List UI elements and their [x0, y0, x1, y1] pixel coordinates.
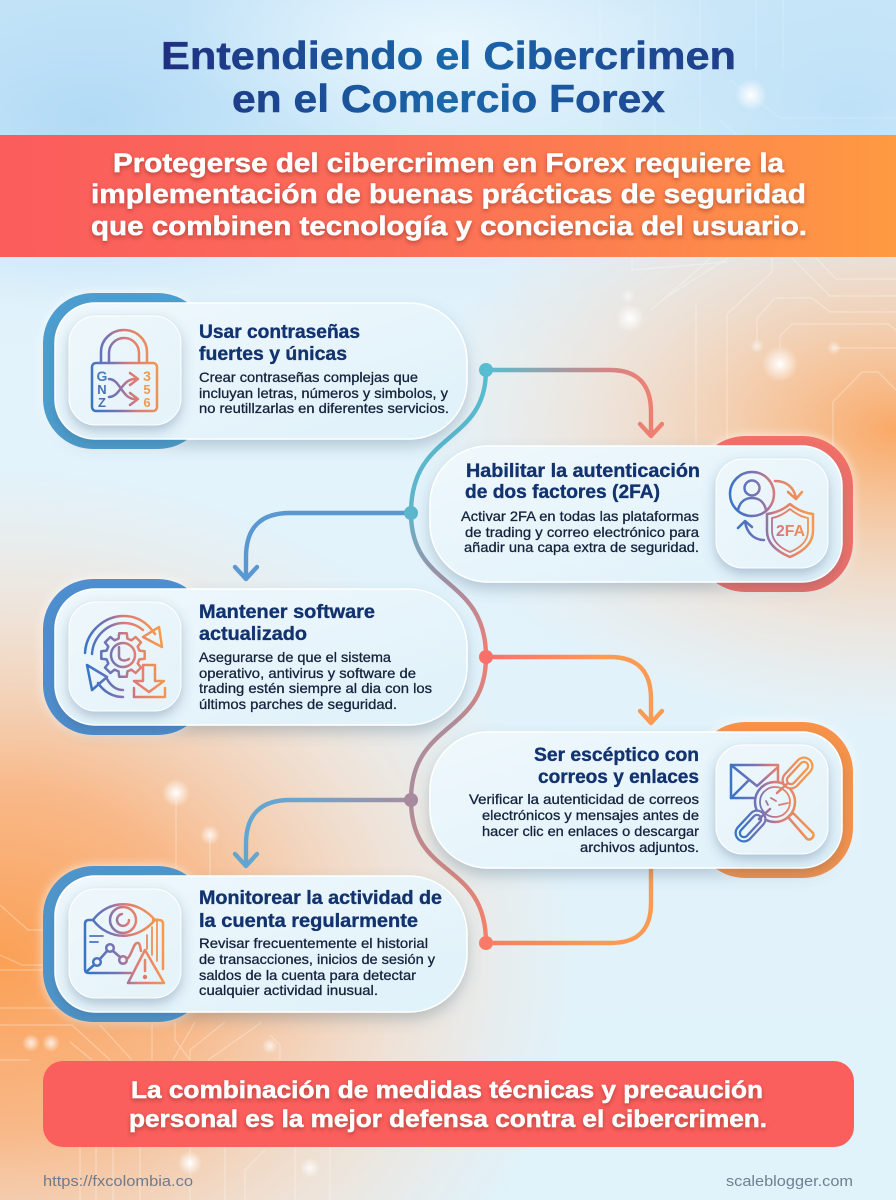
icon: gear and update arrows — [85, 616, 165, 697]
step 5 body: cualquier actividad inusual. — [199, 982, 378, 998]
banner text: que combinen tecnología y conciencia del usuario. — [91, 211, 807, 241]
step 1 body — [199, 369, 449, 416]
step 5 body: de transacciones, inicios de sesión y — [199, 951, 435, 967]
card backing — [43, 866, 208, 1022]
step 1 body: no reutillzarlas en diferentes servicios. — [199, 400, 449, 416]
step 3 heading: Mantener software — [199, 602, 375, 623]
step 2 heading: de dos factores (2FA) — [465, 482, 660, 503]
arrow: to step 3 — [235, 513, 411, 579]
card backing — [43, 293, 208, 449]
bottom banner text: La combinación de medidas técnicas y precaución — [131, 1077, 763, 1104]
card body — [430, 446, 842, 582]
step 2 body: Activar 2FA en todas las plataformas — [461, 508, 699, 524]
step 3 body: trading estén siempre al dia con los — [199, 680, 432, 696]
panel: step 1 contraseñas — [43, 293, 467, 449]
arrow: to step 2 — [486, 370, 662, 436]
arrow: to step 4 — [486, 657, 662, 723]
step 5 body — [199, 935, 435, 998]
step 5 heading: Monitorear la actividad de — [199, 888, 442, 909]
top banner — [0, 135, 896, 257]
step 4 heading — [534, 745, 699, 788]
step 2 body — [461, 508, 699, 555]
step 5 body: Revisar frecuentemente el historial — [199, 935, 428, 951]
step 5 body: saldos de la cuenta para detectar — [199, 967, 416, 983]
banner text: implementación de buenas prácticas de seguridad — [91, 179, 806, 209]
step 4 body: Verificar la autenticidad de correos — [469, 791, 699, 807]
nodes — [404, 363, 493, 950]
step 2 body: de trading y correo electrónico para — [465, 524, 699, 540]
step 1 body: incluyan letras, números y simbolos, y — [199, 385, 448, 401]
step 3 body: últimos parches de seguridad. — [199, 696, 397, 712]
footer right credit: scaleblogger.com — [726, 1173, 853, 1190]
bottom banner — [43, 1061, 854, 1147]
step 2 heading: Habilitar la autenticación — [466, 461, 700, 482]
icon tile — [69, 316, 181, 425]
icon tile — [716, 745, 828, 854]
icon: padlock: G — [97, 368, 108, 384]
panel: step 3 software — [43, 579, 467, 735]
icon: user and 2FA shield — [730, 472, 813, 557]
icon: padlock: N — [97, 382, 107, 397]
card backing — [695, 436, 853, 592]
step 3 body: Asegurarse de que el sistema — [199, 649, 391, 665]
step 1 body: Crear contraseñas complejas que — [199, 369, 418, 385]
icon: padlock: Z — [98, 395, 106, 410]
step 3 body: operativo, antivirus y software de — [199, 665, 416, 681]
card backing — [43, 579, 208, 735]
icon tile — [69, 602, 181, 711]
icon: envelope, broken link, magnifier — [731, 765, 814, 839]
icon: padlock: 6 — [143, 395, 151, 410]
step 4 body: archivos adjuntos. — [580, 839, 699, 855]
step 5 heading: la cuenta regularmente — [199, 911, 418, 932]
step 3 heading — [199, 602, 375, 645]
step 2 heading — [465, 461, 700, 503]
icon: user and 2FA shield: 2FA — [776, 523, 805, 540]
icon: padlock — [92, 330, 157, 411]
card backing — [695, 722, 853, 878]
card body — [55, 589, 467, 725]
step 1 heading — [199, 322, 360, 365]
card body — [430, 732, 842, 868]
footer left url: https://fxcolombia.co — [43, 1173, 193, 1190]
step 4 heading: Ser escéptico con — [534, 745, 699, 766]
bottom banner text: personal es la mejor defensa contra el cibercrimen. — [129, 1106, 767, 1133]
card body — [55, 876, 467, 1012]
connector: orange return line — [486, 860, 651, 943]
icon: padlock: 3 — [143, 368, 151, 384]
panel: step 4 correos — [430, 722, 853, 878]
banner text — [91, 148, 807, 241]
arrow: to step 5 — [235, 800, 411, 866]
icon tile — [716, 459, 828, 568]
step 2 body: añadir una capa extra de seguridad. — [464, 539, 699, 555]
icon tile — [69, 889, 181, 998]
title — [161, 35, 736, 121]
step 5 heading — [199, 888, 442, 932]
panel: step 2 2FA — [430, 436, 853, 592]
title: en el Comercio Forex — [232, 78, 665, 121]
step 1 heading: Usar contraseñas — [199, 322, 360, 343]
banner text: Protegerse del cibercrimen en Forex requiere la — [113, 148, 785, 178]
icon: padlock: 5 — [143, 382, 151, 397]
step 4 body — [469, 791, 699, 855]
title: Entendiendo el Cibercrimen — [161, 35, 736, 78]
card body — [55, 303, 467, 439]
step 4 body: electrónicos y mensajes antes de — [482, 807, 699, 823]
bottom banner text — [129, 1077, 767, 1133]
panel: step 5 monitoreo — [43, 866, 467, 1022]
connector: flow lines and arrows — [235, 363, 662, 950]
icon: eye, chart, warning — [85, 904, 164, 983]
step 4 body: hacer clic en enlaces o descargar — [482, 823, 699, 839]
step 1 heading: fuertes y únicas — [199, 344, 347, 365]
step 3 heading: actualizado — [199, 624, 307, 645]
step 3 body — [199, 649, 432, 712]
connector: central spine — [411, 370, 486, 943]
step 4 heading: correos y enlaces — [538, 767, 699, 788]
